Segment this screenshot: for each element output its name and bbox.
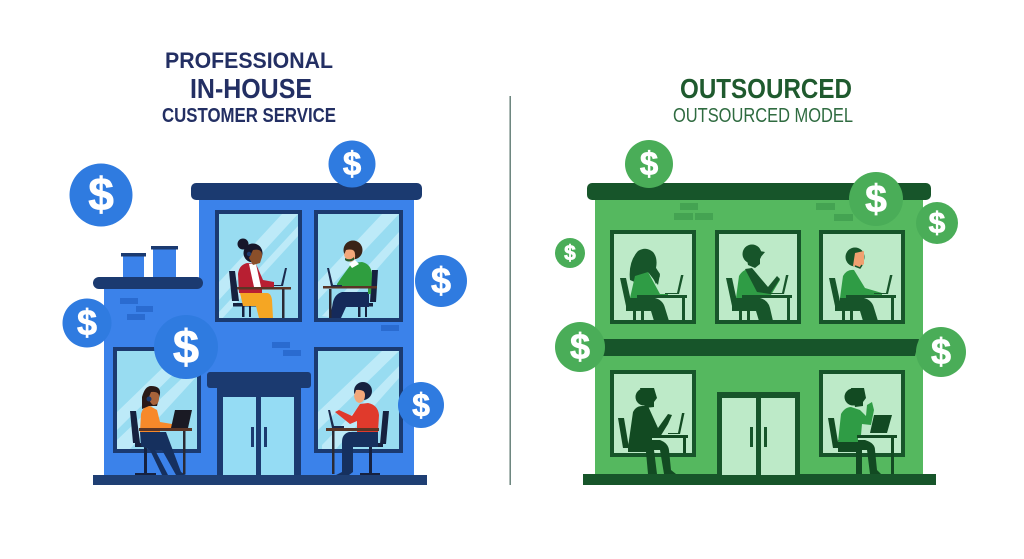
center divider: [510, 96, 511, 485]
icon: blue dollar coin right: $: [431, 260, 451, 301]
entrance door: [207, 372, 311, 475]
figure: man at desk: [323, 240, 378, 318]
mid band: [603, 339, 919, 356]
icon: green dollar coin far right: $: [929, 207, 946, 240]
window: man in green: [314, 210, 403, 322]
upper roof: [191, 183, 422, 200]
icon: green dollar coin band left: $: [570, 326, 590, 367]
icon: blue dollar coin right: [415, 255, 467, 307]
ground: [93, 475, 427, 485]
icon: green dollar coin roof right: [849, 172, 903, 226]
icon: green dollar coin top: $: [640, 145, 658, 182]
icon: blue dollar coin top: [328, 140, 376, 188]
entrance door: [717, 392, 800, 475]
building body: [104, 198, 414, 475]
panel: outsourced green building: [583, 183, 936, 485]
icon: green dollar coin top: [625, 140, 673, 188]
building body: [595, 198, 923, 475]
icon: blue dollar coin lower left: $: [77, 302, 97, 343]
icon: green dollar coin band left: [555, 322, 605, 372]
icon: green dollar coin band right: $: [931, 331, 951, 372]
title: in-house heading: CUSTOMER SERVICE: [162, 105, 336, 127]
title: in-house heading: PROFESSIONAL: [165, 48, 333, 73]
window: silhouette man with phone: [715, 230, 801, 324]
icon: blue dollar coin large left: $: [88, 168, 114, 220]
icon: blue dollar coin lower right: $: [412, 387, 430, 423]
bricks: [120, 298, 399, 356]
icon: green dollar coin small left: [555, 238, 585, 268]
figure: woman at desk: [229, 238, 291, 318]
window: woman in orange: [113, 347, 201, 453]
window: woman in red: [215, 210, 302, 322]
roof: [587, 183, 931, 200]
lower roof: [93, 277, 203, 289]
figure: silhouette seated agent: [618, 388, 688, 474]
icon: green dollar coin roof right: $: [865, 178, 887, 221]
icon: blue dollar coin top: $: [343, 145, 361, 182]
figure: green-shirted agent: [829, 248, 896, 321]
title: outsourced heading: OUTSOURCED: [680, 73, 852, 104]
figure: green agent with laptop: [828, 388, 897, 474]
icon: green dollar coin small left: $: [564, 242, 576, 265]
window: bottom right agent: [819, 370, 905, 457]
figure: woman in orange at desk: [130, 386, 192, 475]
window: bottom left silhouette: [610, 370, 696, 457]
window: man in red: [314, 347, 403, 453]
window: agent with orange face: [819, 230, 905, 324]
ground: [583, 474, 936, 485]
chimneys: [121, 246, 178, 278]
title: in-house heading: IN-HOUSE: [190, 73, 312, 104]
icon: blue dollar coin lower right: [398, 382, 444, 428]
icon: green dollar coin band right: [916, 327, 966, 377]
figure: man in red at desk: [326, 382, 389, 475]
bricks: [674, 203, 853, 221]
icon: blue dollar coin large left: [70, 164, 132, 226]
icon: blue dollar coin center: $: [173, 320, 199, 373]
panel: in-house blue building: [93, 183, 427, 485]
icon: green dollar coin far right: [916, 202, 958, 244]
figure: agent with phone: [726, 244, 792, 321]
window: silhouette woman with headset: [610, 230, 696, 324]
title: in-house heading: [162, 48, 336, 127]
title: outsourced heading: OUTSOURCED MODEL: [673, 105, 853, 127]
title: outsourced heading: [673, 73, 853, 127]
icon: blue dollar coin center: [154, 315, 218, 379]
icon: blue dollar coin lower left: [62, 298, 112, 348]
figure: long-haired agent: [620, 249, 687, 321]
